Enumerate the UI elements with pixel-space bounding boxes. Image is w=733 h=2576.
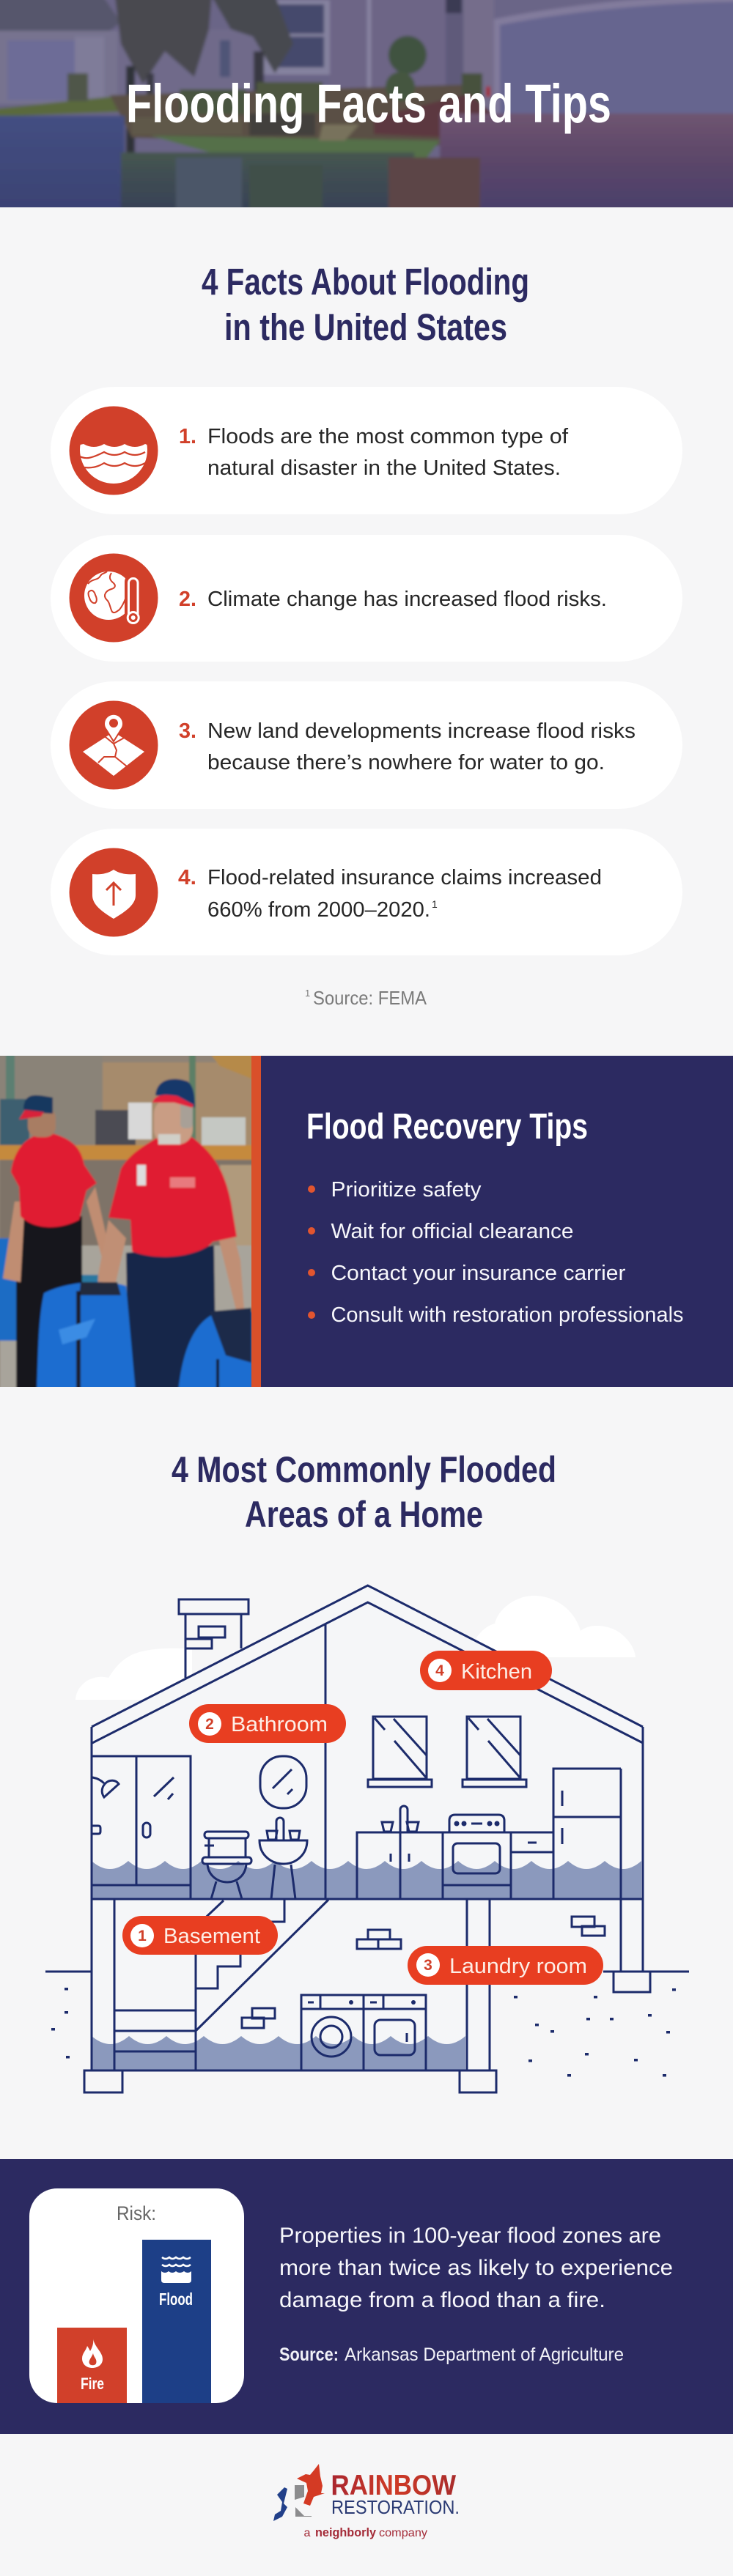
tip 3: Contact your insurance carrier	[331, 1262, 626, 1285]
basement stairs	[114, 1899, 328, 2070]
main technician	[126, 1246, 216, 1392]
risk statement: Properties in 100-year flood zones are	[279, 2224, 661, 2248]
bathroom sink	[259, 1818, 307, 1899]
chart title: Risk:	[117, 2202, 156, 2224]
tip 1: Prioritize safety	[331, 1178, 482, 1202]
heading: commonly flooded areas: 4 Most Commonly Flooded	[172, 1449, 556, 1490]
risk statement	[279, 2224, 673, 2312]
heading: 4 facts	[202, 261, 529, 348]
hero banner: flooded house photo with title	[0, 0, 733, 227]
house structure lines	[45, 1585, 689, 2092]
fact text 3: 3.	[179, 719, 196, 743]
fact text 4: 4.	[178, 866, 196, 889]
second technician	[16, 1216, 82, 1392]
label: 3 Laundry room	[408, 1946, 603, 1985]
panel: flood recovery tips	[0, 1048, 733, 1396]
label: 2 Bathroom	[189, 1704, 346, 1743]
fact text 3	[179, 719, 636, 774]
kitchen windows	[368, 1717, 526, 1787]
logo: Rainbow Restoration	[273, 2464, 460, 2539]
wordmark second line: RESTORATION.	[331, 2496, 460, 2518]
icon: globe and thermometer	[69, 554, 158, 642]
fact text 1: Floods are the most common type of	[207, 425, 569, 448]
house cutaway illustration	[45, 1585, 689, 2092]
heading: 4 facts: 4 Facts About Flooding	[202, 261, 529, 303]
logo mark	[273, 2464, 325, 2521]
icon: water	[161, 2257, 191, 2283]
refrigerator	[553, 1769, 621, 1899]
heading: commonly flooded areas	[172, 1449, 556, 1535]
bar: flood: Flood	[159, 2290, 193, 2309]
mirror	[260, 1756, 306, 1808]
fact card 2	[51, 535, 682, 662]
source line: Source:	[279, 2344, 339, 2365]
label: 1 Basement: Basement	[163, 1925, 260, 1948]
fact text 1: 1.	[179, 425, 196, 448]
tip 4: Consult with restoration professionals	[331, 1303, 683, 1327]
tagline: a	[303, 2527, 311, 2539]
fact text 2: 2.	[179, 588, 196, 611]
dryer	[364, 1995, 426, 2070]
main title: Flooding Facts and Tips	[126, 73, 611, 134]
tip 2: Wait for official clearance	[331, 1220, 573, 1243]
house fill	[92, 1585, 643, 2070]
source note: FEMA: Source: FEMA	[313, 987, 427, 1009]
heading: commonly flooded areas: Areas of a Home	[245, 1494, 483, 1535]
fact text 4: 660% from 2000–2020.	[207, 898, 430, 922]
heading: 4 facts: in the United States	[224, 306, 507, 348]
icon: flame	[82, 2339, 103, 2368]
fact text 3: New land developments increase flood risks	[207, 719, 636, 743]
fact card 1	[51, 387, 682, 514]
icon: map pin on land plot	[69, 700, 158, 790]
tips heading: Flood Recovery Tips	[306, 1107, 588, 1147]
label: 4 Kitchen	[420, 1651, 552, 1690]
bar chart card	[29, 2188, 244, 2403]
photo: restoration technicians with air movers	[0, 1048, 260, 1396]
tagline	[303, 2525, 427, 2539]
bricks	[242, 1917, 605, 2028]
bar: fire: Fire	[81, 2375, 104, 2393]
orange divider band	[251, 1056, 261, 1387]
source line: Arkansas Department of Agriculture	[345, 2344, 624, 2365]
label: 3 Laundry room: Laundry room	[449, 1955, 587, 1978]
label: 4 Kitchen: Kitchen	[461, 1660, 532, 1684]
label: 3 Laundry room: 3	[424, 1957, 432, 1974]
source note: FEMA: 1	[305, 988, 310, 999]
flood water: basement	[92, 2036, 465, 2070]
clouds	[75, 1596, 636, 1700]
label: 2 Bathroom: 2	[205, 1716, 214, 1733]
air movers	[37, 1282, 136, 1392]
panel: flood versus fire risk	[0, 2159, 733, 2434]
label: 2 Bathroom: Bathroom	[231, 1713, 328, 1736]
flood water: upper floor	[92, 1861, 641, 1899]
label: 1 Basement: 1	[138, 1928, 147, 1944]
fact card 3	[51, 681, 682, 809]
label: 4 Kitchen: 4	[435, 1662, 444, 1679]
fact text 4: 1	[432, 898, 438, 910]
risk statement: damage from a flood than a fire.	[279, 2288, 605, 2312]
fact text 2: Climate change has increased flood risks.	[207, 588, 607, 611]
bar: fire	[57, 2328, 127, 2403]
fact text 4: Flood-related insurance claims increased	[207, 866, 602, 889]
fact text 1	[179, 425, 569, 480]
bar: flood	[142, 2240, 211, 2403]
tagline: neighborly	[315, 2525, 377, 2539]
tagline: company	[379, 2527, 427, 2539]
label: 1 Basement	[122, 1916, 278, 1955]
wordmark: RAINBOW	[331, 2470, 456, 2501]
icon: shield with up arrow	[69, 848, 158, 936]
oven	[443, 1815, 511, 1899]
fact text 4	[178, 866, 602, 922]
fact text 3: because there’s nowhere for water to go.	[207, 751, 605, 774]
risk statement: more than twice as likely to experience	[279, 2256, 673, 2280]
icon: water waves	[69, 406, 158, 495]
hero photo illustration	[0, 0, 733, 227]
fact card 4	[51, 829, 682, 955]
toilet	[202, 1832, 251, 1899]
soil dots	[51, 1988, 676, 2076]
fact text 1: natural disaster in the United States.	[207, 456, 561, 480]
kitchen cabinets and sink	[357, 1806, 553, 1899]
chimney	[179, 1599, 248, 1678]
shower	[92, 1756, 191, 1899]
washer	[301, 1995, 364, 2070]
kitchen drawer	[511, 1843, 553, 1852]
